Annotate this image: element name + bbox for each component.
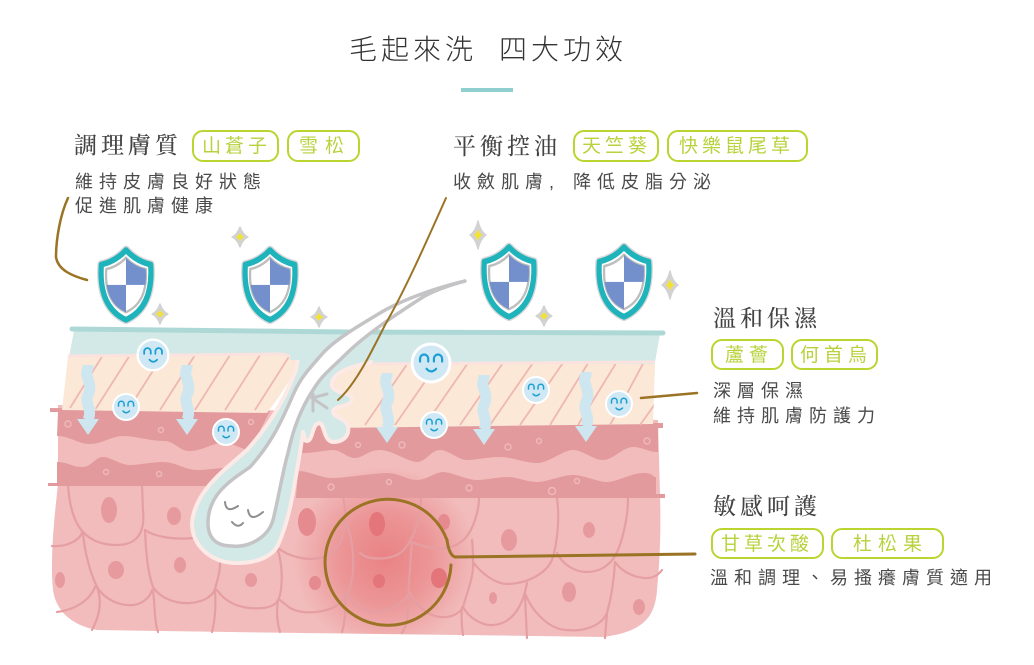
- title underline: [461, 88, 513, 92]
- protective shields: [100, 247, 650, 324]
- follicle sheath: [192, 345, 378, 563]
- leader line: skin conditioning: [56, 198, 87, 280]
- block: skin conditioning: [74, 131, 359, 216]
- dermis band right upper: [298, 423, 663, 463]
- description: 促進肌膚健康: [75, 196, 219, 216]
- title: 四大功效: [499, 34, 627, 65]
- fat hatch left: [70, 355, 290, 410]
- block: gentle moisture: [712, 306, 881, 426]
- tag: glycyrrhizic acid: [712, 529, 823, 558]
- tag: fallopia: 何首烏: [800, 344, 872, 366]
- tag: cedar: [288, 131, 359, 161]
- sparkle stars: [152, 221, 678, 327]
- description: 收斂肌膚,: [453, 172, 560, 192]
- tag: litsea: [193, 131, 278, 161]
- tag: geranium: [574, 131, 658, 161]
- description: 維持肌膚防護力: [713, 406, 881, 426]
- description: 降低皮脂分泌: [573, 172, 717, 192]
- fat layer left: [62, 355, 296, 413]
- tag: aloe: [712, 340, 783, 369]
- skin surface line: [72, 329, 663, 333]
- dermis band left lower: [48, 457, 265, 486]
- fat hatch right: [365, 360, 665, 425]
- heading: 平衡控油: [453, 134, 561, 159]
- leader line: oil balance: [338, 198, 446, 400]
- leader line: deep moisture: [641, 393, 697, 398]
- hair and bulb: [208, 281, 465, 546]
- description: 溫和調理、易搔癢膚質適用: [710, 568, 998, 588]
- heading: 調理膚質: [74, 133, 182, 158]
- title: 毛起來洗: [349, 34, 477, 65]
- tag: fir fruit: [832, 529, 943, 558]
- dermis band left upper: [50, 408, 270, 451]
- sleeping face on bulb: [225, 502, 263, 526]
- small rings in dermis: [65, 420, 650, 494]
- sebaceous gland mark: [312, 394, 327, 411]
- fat layer right: [330, 364, 655, 428]
- description: 深層保濕: [713, 381, 809, 401]
- irritation circle and leader line: [325, 499, 695, 625]
- epidermis patch: [290, 336, 382, 360]
- block: oil balance: [453, 131, 807, 192]
- heading: 敏感呵護: [713, 494, 821, 519]
- tag: fir fruit: 杜松果: [853, 533, 928, 555]
- tag: clary sage: [668, 131, 807, 161]
- skin cell outlines: [52, 485, 662, 638]
- tag: fallopia: [792, 340, 877, 369]
- tag: clary sage: 快樂鼠尾草: [679, 135, 794, 157]
- water arrows: [77, 365, 597, 445]
- fat pale top outlines: [68, 354, 655, 369]
- dermis band right lower: [296, 471, 665, 498]
- lower skin base: [52, 405, 660, 637]
- cell nuclei: [55, 497, 645, 615]
- tag: aloe: 蘆薈: [725, 344, 773, 366]
- red irritation glow: [303, 498, 468, 634]
- description: 維持皮膚良好狀態: [75, 172, 267, 192]
- tag: cedar: 雪松: [299, 135, 351, 157]
- skin cross-section illustration: [48, 281, 665, 650]
- heading: 溫和保濕: [713, 306, 821, 331]
- tag: geranium: 天竺葵: [582, 135, 651, 157]
- tag: glycyrrhizic acid: 甘草次酸: [721, 533, 813, 555]
- epidermis layer: [68, 331, 660, 380]
- block: sensitive care: [710, 494, 998, 588]
- smiling water droplets: [113, 340, 632, 445]
- tag: litsea: 山蒼子: [202, 135, 271, 157]
